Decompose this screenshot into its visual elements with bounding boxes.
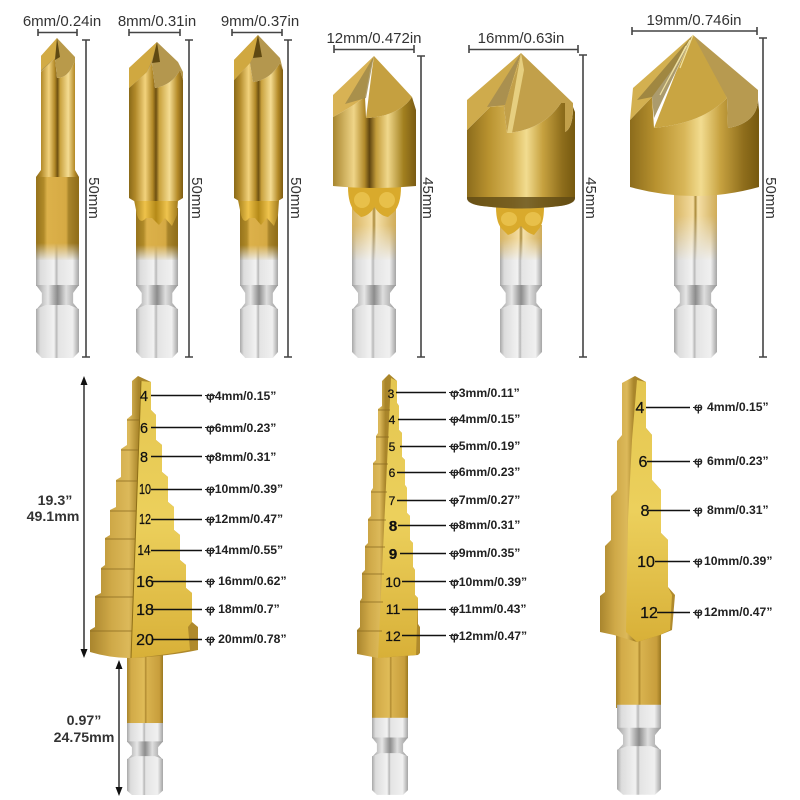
hex shank (136, 208, 178, 262)
length dimension: 50mm: 50mm (287, 177, 304, 219)
size markings: 4 (140, 388, 148, 405)
size markings: 6 (639, 454, 648, 471)
size labels: φ 18mm/0.7” (206, 602, 280, 616)
size labels: φ8mm/0.31” (206, 450, 276, 464)
dimension: 19mm width: 19mm/0.746in (646, 12, 742, 29)
length dimension: 50mm (759, 38, 779, 357)
size markings: 8 (389, 518, 397, 535)
dimension: 6mm width: 6mm/0.24in (23, 13, 101, 30)
length dimension: 50mm: 50mm (188, 177, 205, 219)
length dimension: 45mm: 45mm (582, 177, 599, 219)
length dimension: 50mm: 50mm (762, 177, 779, 219)
size labels: 8mm/0.31” (707, 503, 769, 517)
size labels: 6mm/0.23” (707, 454, 769, 468)
19mm countersink bit (630, 35, 759, 358)
size labels: φ5mm/0.19” (450, 439, 520, 453)
size labels: φ (694, 605, 703, 619)
step drill C 4-12mm (600, 376, 772, 795)
shaft (129, 63, 183, 201)
head (467, 103, 575, 208)
phi dashes (449, 392, 459, 636)
size markings: 8 (641, 503, 650, 520)
size labels: φ10mm/0.39” (450, 575, 527, 589)
collar (134, 200, 178, 226)
collar highlights (501, 212, 541, 226)
size labels: φ 20mm/0.78” (206, 632, 287, 646)
step drill B 3-12mm (357, 374, 527, 795)
collar (496, 207, 544, 235)
size markings: 12 (139, 511, 151, 528)
length dimension: 45mm (579, 55, 599, 357)
collar (238, 200, 279, 226)
shank (127, 655, 163, 795)
size labels: φ6mm/0.23” (450, 465, 520, 479)
dimension: 12mm width: 12mm/0.472in (326, 30, 422, 47)
size markings: 16 (136, 574, 154, 591)
size labels: φ14mm/0.55” (206, 543, 283, 557)
leader lines (396, 392, 446, 636)
size markings: 10 (139, 481, 151, 498)
shank length arrow 0.97in: 24.75mm (54, 730, 114, 746)
hex shank (352, 205, 396, 262)
size markings: 3 (388, 387, 395, 401)
dimension: 16mm width: 16mm/0.63in (478, 30, 564, 47)
size markings: 8 (140, 449, 148, 466)
head (630, 97, 759, 196)
dimension: 8mm width: 8mm/0.31in (118, 13, 196, 30)
16mm countersink bit (467, 53, 575, 358)
length dimension: 50mm (284, 40, 304, 357)
size labels (694, 400, 772, 619)
shank length arrow 0.97in (54, 660, 122, 796)
size markings (636, 400, 658, 622)
size markings: 12 (385, 628, 401, 644)
silver fade (674, 215, 717, 261)
leader lines (151, 396, 202, 640)
flute edge (131, 381, 141, 658)
size markings: 12 (640, 605, 658, 622)
lower chamfer (467, 197, 575, 208)
size labels: φ 16mm/0.62” (206, 574, 287, 588)
silver fade (500, 240, 542, 260)
dimension: 9mm width: 9mm/0.37in (221, 13, 299, 30)
silver fade (136, 245, 178, 261)
size labels: 10mm/0.39” (704, 554, 772, 568)
shank (372, 655, 408, 795)
silver fade (240, 245, 278, 261)
length dimension: 45mm (417, 56, 436, 357)
hex shank (674, 195, 717, 262)
flute face (131, 381, 192, 658)
size labels: φ (694, 503, 703, 517)
head (333, 97, 416, 188)
collar (348, 187, 401, 217)
size labels: φ9mm/0.35” (450, 546, 520, 560)
silver fade (352, 225, 396, 261)
flute face (378, 378, 418, 658)
size labels (206, 389, 287, 646)
step shadows (357, 410, 390, 631)
size labels: φ (694, 454, 703, 468)
step drill A 4-20mm (90, 376, 287, 795)
stepped body (357, 374, 420, 658)
cutting cone (693, 35, 758, 128)
silver shank end (352, 260, 396, 358)
length dimension: 50mm (82, 40, 102, 357)
size markings: 5 (389, 440, 396, 454)
size labels: φ6mm/0.23” (206, 421, 276, 435)
size markings: 9 (389, 546, 397, 563)
size labels: φ12mm/0.47” (206, 512, 283, 526)
9mm countersink bit (234, 35, 283, 358)
size markings (136, 388, 154, 649)
overall length arrow 19.3in: 19.3” (38, 493, 72, 509)
silver shank end (500, 260, 542, 358)
stepped body (90, 376, 198, 658)
size markings: 11 (386, 601, 400, 617)
length dimension: 45mm: 45mm (419, 177, 436, 219)
phi dashes (693, 408, 702, 612)
hex shank (500, 225, 542, 262)
size markings: 20 (136, 632, 154, 649)
shaft (234, 63, 283, 201)
shank length arrow 0.97in: 0.97” (67, 713, 101, 729)
size markings: 6 (389, 466, 396, 480)
silver shank end (240, 260, 278, 358)
silver shank end (674, 260, 717, 358)
size labels: φ4mm/0.15” (206, 389, 276, 403)
shank (616, 630, 661, 795)
overall length arrow 19.3in: 49.1mm (27, 509, 79, 525)
size labels: φ (694, 554, 703, 568)
size labels: φ4mm/0.15” (450, 412, 520, 426)
cutting cone (41, 38, 75, 78)
hex shank (240, 208, 278, 262)
size labels: 12mm/0.47” (704, 605, 772, 619)
flute face (626, 380, 672, 642)
dimension: 19mm width (632, 12, 757, 35)
size labels: φ3mm/0.11” (450, 386, 520, 400)
size labels: φ8mm/0.31” (450, 518, 520, 532)
size labels: φ10mm/0.39” (206, 482, 283, 496)
size labels: φ (694, 400, 703, 414)
cutting cone (234, 35, 283, 82)
length dimension: 50mm (185, 40, 205, 357)
size labels (450, 386, 527, 643)
gold hex shank (36, 177, 79, 261)
6mm countersink bit (36, 38, 79, 358)
size markings (385, 387, 401, 644)
size markings: 10 (637, 554, 655, 571)
silver fade (36, 244, 79, 260)
silver shank end (136, 260, 178, 358)
size markings: 7 (389, 494, 396, 508)
size markings: 6 (140, 420, 148, 437)
step shadows (90, 420, 139, 631)
size markings: 10 (385, 574, 401, 590)
size markings: 18 (136, 602, 154, 619)
cutting cone (504, 53, 573, 133)
cutting cone (129, 42, 183, 88)
size labels: φ11mm/0.43” (450, 602, 526, 616)
size markings: 4 (636, 400, 645, 417)
collar highlights (354, 192, 395, 208)
dimension: 16mm width (469, 30, 578, 53)
size markings: 4 (389, 413, 396, 427)
12mm countersink bit (333, 56, 416, 358)
size labels: φ12mm/0.47” (450, 629, 527, 643)
size labels: 4mm/0.15” (707, 400, 769, 414)
size markings: 14 (138, 542, 150, 559)
cutting cone (366, 56, 412, 118)
length dimension: 50mm: 50mm (85, 177, 102, 219)
leader lines (646, 408, 690, 612)
stepped body (600, 376, 675, 642)
size labels: φ7mm/0.27” (450, 493, 520, 507)
silver shank end (36, 260, 79, 358)
8mm countersink bit (129, 42, 183, 358)
phi dashes (205, 396, 215, 640)
overall length arrow 19.3in (27, 376, 88, 658)
shaft (36, 58, 79, 177)
